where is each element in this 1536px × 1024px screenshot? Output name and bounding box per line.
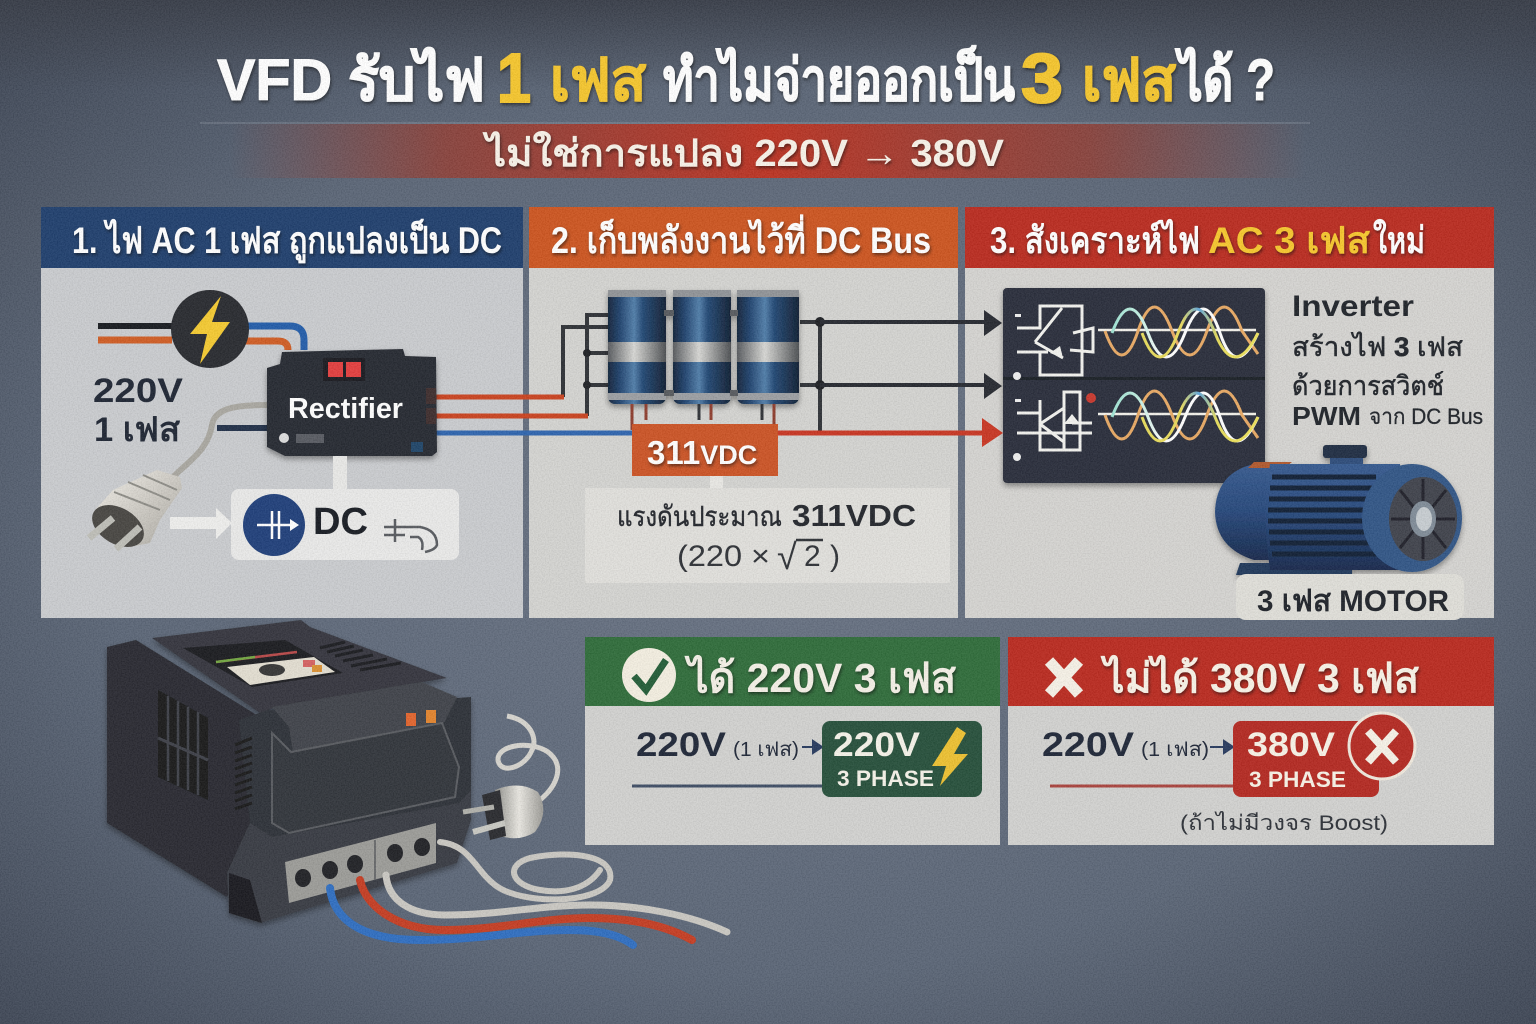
cannot-do header: ไม่ได้ 380V 3 เฟส: [1100, 654, 1419, 701]
can-do header: ได้ 220V 3 เฟส: [684, 654, 956, 701]
DC callout: [231, 489, 459, 560]
front face: [239, 697, 471, 873]
connector: [710, 476, 723, 494]
title: ได้ ?: [1174, 47, 1275, 113]
panel: can do: [585, 637, 1000, 845]
top face: [152, 620, 447, 713]
title: เฟส: [550, 48, 647, 113]
voltage note: [585, 488, 950, 583]
IGBT symbol bottom: [1017, 392, 1092, 450]
voltage note: ): [830, 540, 840, 573]
title: ทำไมจ่ายออกเป็น: [663, 45, 1015, 113]
inverter description: PWM: [1292, 401, 1361, 431]
panel: step 2: [523, 207, 966, 618]
display: [183, 640, 343, 687]
title: VFD รับไฟ: [217, 47, 485, 113]
door: [272, 723, 459, 833]
arrow: plug to DC: [170, 508, 232, 539]
step 3 header: AC 3 เฟส: [1208, 220, 1370, 261]
voltage note: (220 ×: [677, 540, 770, 573]
coiled plug cable: [498, 716, 558, 800]
cannot-do flow: (1 เฟส): [1141, 739, 1209, 761]
voltage label: [93, 372, 183, 449]
can-do header: [585, 637, 1000, 706]
cannot-do flow: 380V: [1247, 726, 1335, 764]
terminal box: [1330, 455, 1363, 469]
voltage label: 1 เฟส: [94, 411, 180, 449]
cannot-do flow: 220V: [1042, 726, 1134, 764]
voltage note: √: [777, 536, 797, 577]
inverter description: [1292, 290, 1483, 431]
VFD body: [107, 620, 471, 923]
cannot-do header: [1008, 637, 1494, 706]
plug: [463, 785, 543, 840]
can-do flow: [632, 721, 982, 797]
title: 1: [497, 39, 531, 117]
lid strip: [272, 682, 457, 753]
red bus wire: [776, 430, 966, 436]
terminal block: [285, 823, 436, 903]
capacitors: [608, 290, 799, 430]
title: เฟส: [1082, 48, 1177, 113]
voltage note: 2: [804, 540, 821, 573]
VFD device: [107, 620, 727, 945]
step 3 header: ใหม่: [1373, 218, 1425, 261]
waveforms bottom: [1098, 391, 1258, 441]
step 1 header: 1. ไฟ AC 1 เฟส ถูกแปลงเป็น DC: [72, 217, 502, 264]
rear cap: [1215, 463, 1290, 560]
lower front: [227, 790, 471, 923]
311VDC tag: 311VDC: [647, 434, 757, 471]
title: 3: [1021, 39, 1063, 117]
step 2 header: [529, 207, 958, 268]
voltage note: 311VDC: [792, 498, 916, 533]
title: [217, 39, 1275, 117]
motor label: 3 เฟส MOTOR: [1257, 585, 1449, 618]
inverter description: ด้วยการสวิตช์: [1292, 370, 1444, 401]
icon: cross: [1049, 661, 1079, 694]
subtitle banner: ไม่ใช่การแปลง 220V → 380V: [482, 131, 1005, 175]
icon: bolt: [932, 727, 968, 786]
311VDC tag: [632, 424, 778, 476]
step 3 header: 3. สังเคราะห์ไฟ: [990, 218, 1200, 261]
inverter description: Inverter: [1292, 290, 1414, 323]
icon: check: [622, 648, 676, 702]
plug cable: [172, 405, 268, 478]
icon: DC symbol: [384, 519, 437, 552]
base foot: [229, 873, 262, 923]
output wires: [430, 397, 525, 433]
motor front end: [1362, 464, 1462, 572]
LEDs: [406, 710, 436, 726]
step 2 header: 2. เก็บพลังงานไว้ที่ DC Bus: [551, 214, 931, 261]
boost note: (ถ้าไม่มีวงจร Boost): [1180, 811, 1388, 835]
plug: [85, 470, 182, 556]
input wires: [98, 326, 304, 350]
output cables: [330, 842, 727, 945]
cannot-do flow: [1042, 713, 1415, 835]
ribbed body: [1266, 464, 1400, 570]
side face: [107, 640, 270, 897]
DC callout: DC: [313, 501, 368, 543]
step 1 header: [41, 207, 523, 268]
inverter description: สร้างไฟ 3 เฟส: [1292, 332, 1463, 362]
subtitle banner: [200, 123, 1310, 178]
can-do flow: 3 PHASE: [837, 766, 934, 791]
rectifier box: Rectifier: [288, 393, 403, 425]
motor label: [1236, 574, 1464, 620]
can-do flow: (1 เฟส): [733, 739, 799, 761]
arrows to inverter: [820, 310, 1003, 447]
top vent: [320, 642, 401, 670]
cannot-do flow: 3 PHASE: [1249, 767, 1346, 792]
IGBT symbol top: [1017, 306, 1093, 375]
step 3 header: [965, 207, 1494, 268]
connector line: [333, 456, 347, 492]
waveforms top: [1098, 307, 1258, 357]
can-do flow: 220V: [833, 726, 920, 764]
panel: step 1: [41, 207, 525, 618]
DC bus wiring: [523, 315, 825, 433]
voltage note: แรงดันประมาณ: [617, 501, 782, 532]
panel: cannot do: [1008, 637, 1494, 845]
panel: step 3: [965, 207, 1494, 620]
icon: rectifier symbol: [243, 494, 305, 556]
icon: cross badge: [1349, 713, 1415, 779]
icon: lightning bolt: [171, 290, 249, 368]
inverter description: จาก DC Bus: [1369, 404, 1483, 429]
motor feet: [1236, 563, 1352, 575]
rectifier box: [267, 349, 437, 456]
side vents: [158, 690, 208, 800]
motor: [1215, 445, 1462, 575]
voltage label: 220V: [93, 372, 183, 410]
can-do flow: 220V: [636, 726, 726, 764]
inverter modules: [1003, 288, 1265, 483]
